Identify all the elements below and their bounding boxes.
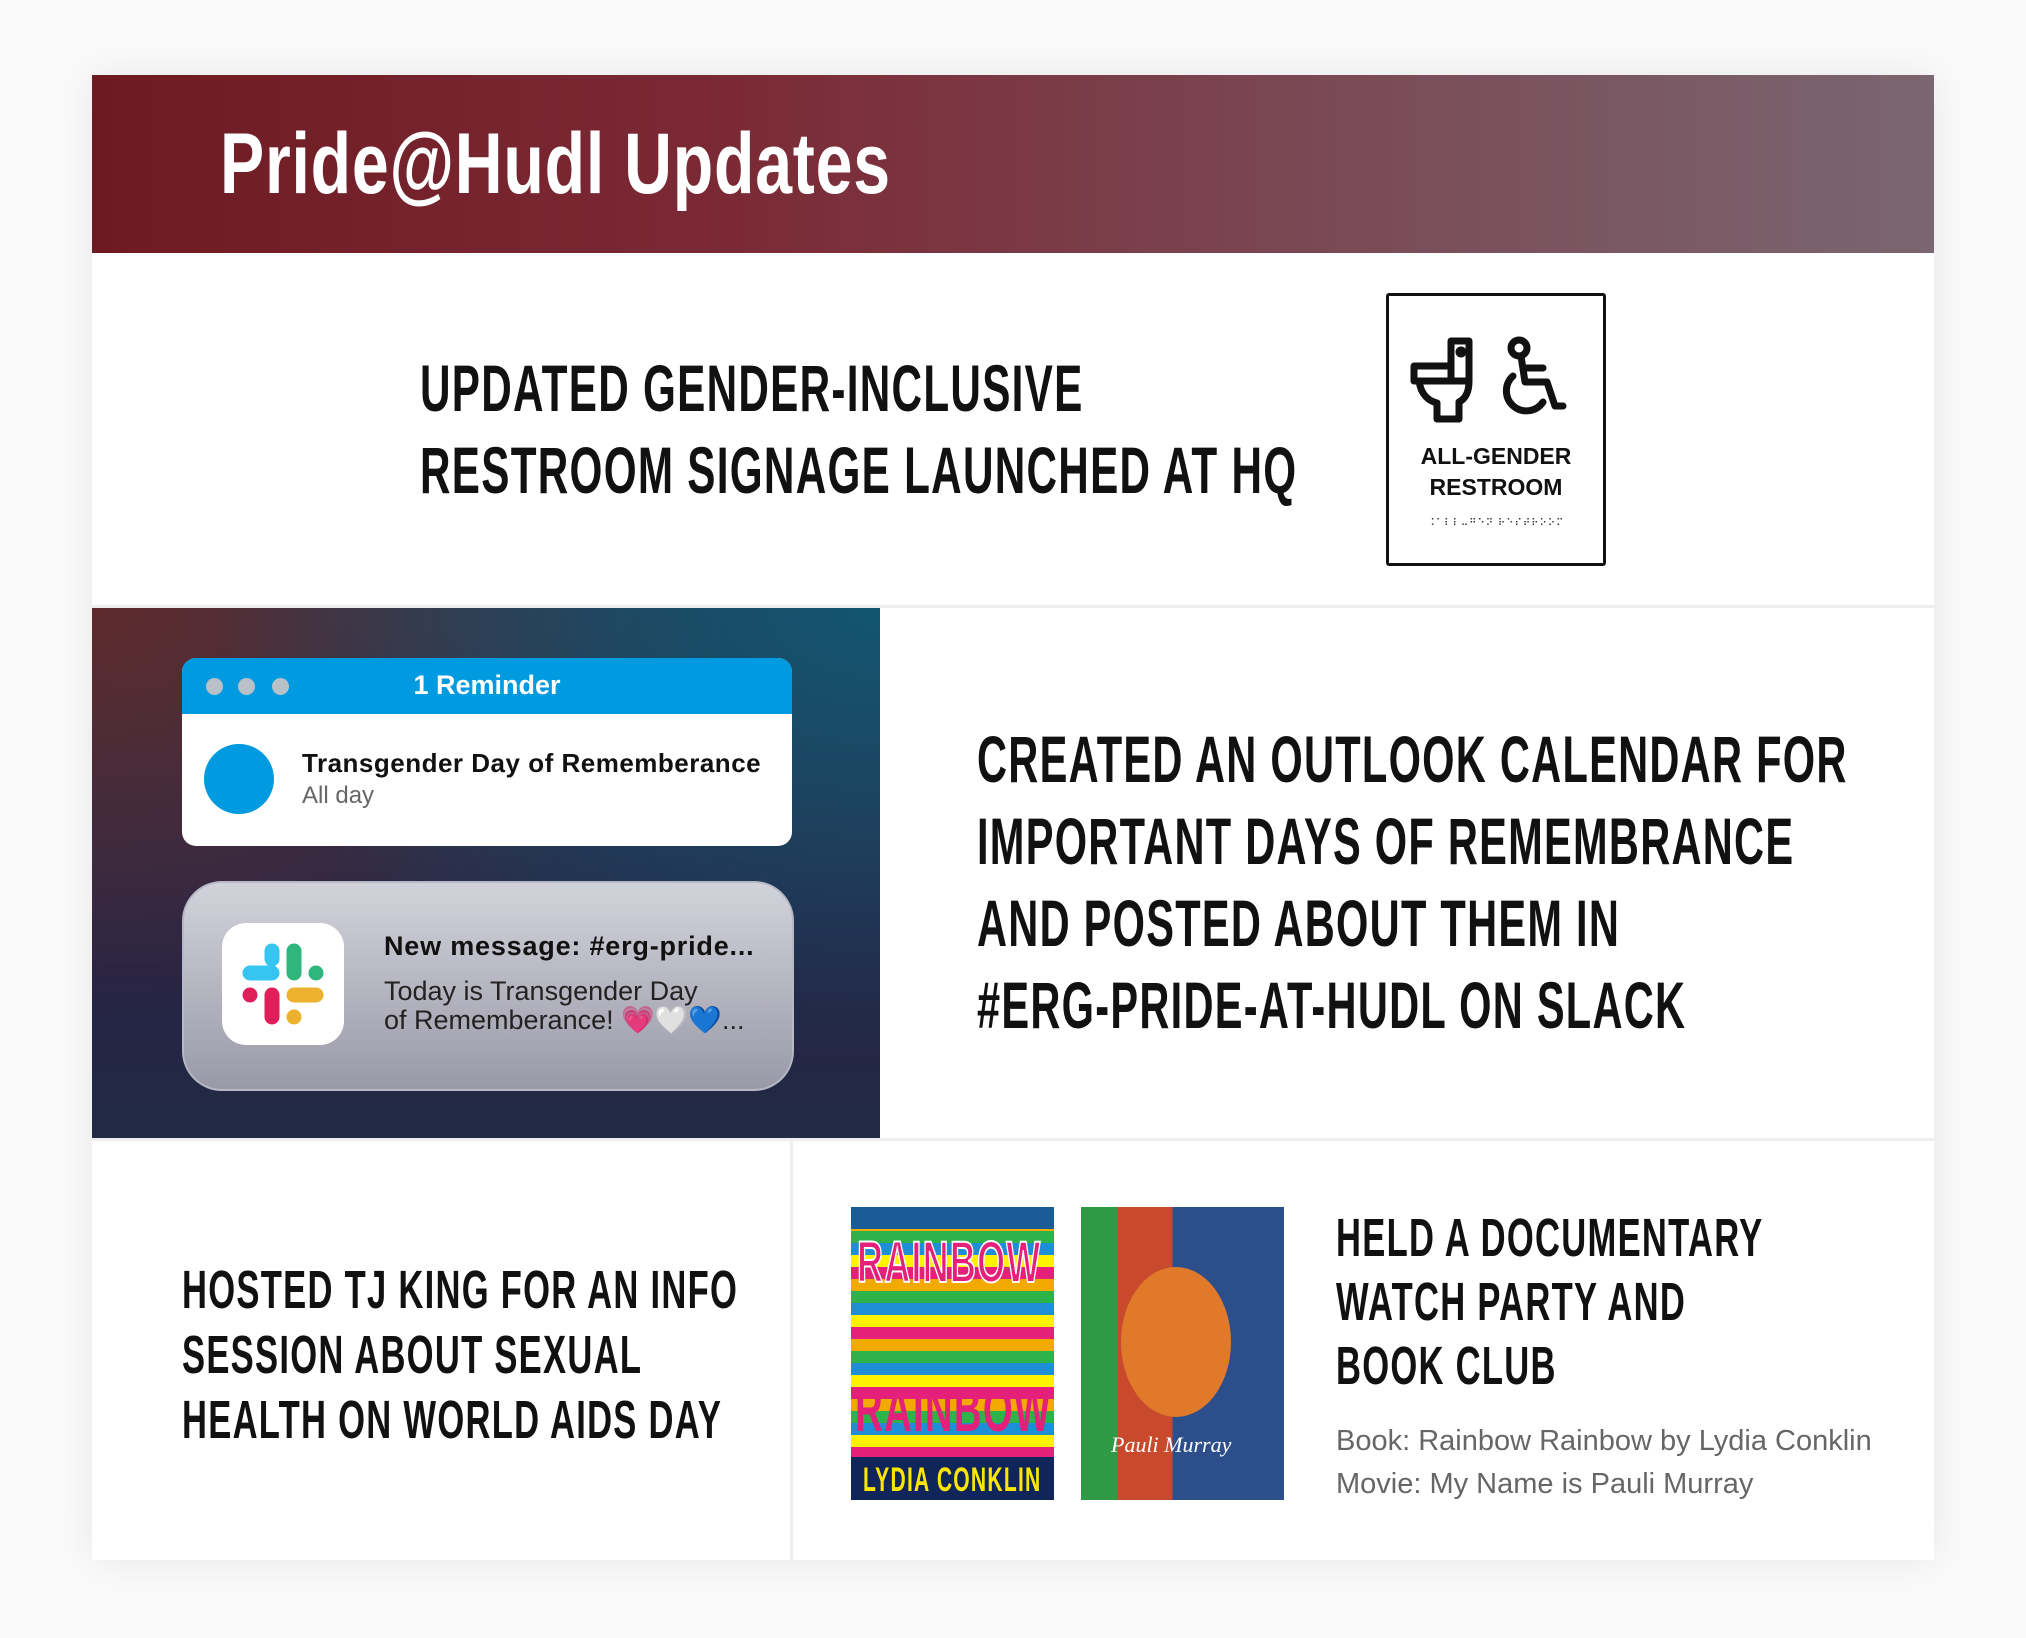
text: outlook calendar: #ERG-PRIDE-AT-HUDL ON SLACK <box>977 968 1686 1042</box>
text: TJ King session: HEALTH ON WORLD AIDS DAY <box>182 1390 722 1450</box>
slack notification: New message: #erg-pride... <box>384 931 754 961</box>
text: restroom signage: UPDATED GENDER-INCLUSIVE <box>420 351 1084 425</box>
reminder card: All day <box>302 782 374 809</box>
text: outlook calendar: IMPORTANT DAYS OF REMEMBRANCE <box>977 804 1794 878</box>
book cover: Rainbow Rainbow: RAINBOW <box>855 1376 1052 1445</box>
text: TJ King session: HOSTED TJ KING FOR AN INFO <box>182 1260 738 1320</box>
text: documentary + book club: WATCH PARTY AND <box>1336 1272 1686 1332</box>
reminder card: 1 Reminder <box>413 670 561 700</box>
movie poster: My Name is Pauli Murray <box>1081 1207 1284 1500</box>
icon: restroom sign: ALL-GENDER <box>1421 443 1571 469</box>
book cover: Rainbow Rainbow: LYDIA CONKLIN <box>863 1461 1042 1499</box>
slack notification <box>182 881 794 1091</box>
icon: restroom sign <box>1386 293 1606 566</box>
slack notification: Today is Transgender Day <box>384 976 698 1006</box>
text: TJ King session: SESSION ABOUT SEXUAL <box>182 1325 642 1385</box>
text: documentary + book club <box>1336 1208 1764 1396</box>
text: documentary + book club: BOOK CLUB <box>1336 1336 1557 1396</box>
movie poster: My Name is Pauli Murray: Pauli Murray <box>1111 1432 1231 1457</box>
text: restroom signage <box>420 351 1297 507</box>
text: documentary + book club: HELD A DOCUMENTARY <box>1336 1208 1764 1268</box>
text: outlook calendar: AND POSTED ABOUT THEM IN <box>977 886 1620 960</box>
icon: restroom sign: RESTROOM <box>1430 474 1562 500</box>
book cover: Rainbow Rainbow <box>851 1207 1054 1500</box>
text: TJ King session <box>182 1260 738 1450</box>
header banner <box>92 75 1934 253</box>
icon: restroom sign: ⠨⠁⠇⠇⠤⠛⠑⠝ ⠗⠑⠎⠞⠗⠕⠕⠍ <box>1428 518 1564 529</box>
panel: notifications image <box>92 608 880 1138</box>
text: book and movie details: Movie: My Name is Pauli Murray <box>1336 1468 1753 1500</box>
reminder card <box>182 658 792 846</box>
reminder card: Transgender Day of Rememberance <box>302 748 761 778</box>
text: outlook calendar: CREATED AN OUTLOOK CALENDAR FOR <box>977 722 1848 796</box>
text: outlook calendar <box>977 722 1848 1042</box>
title: Pride@Hudl Updates <box>220 116 891 212</box>
text: book and movie details <box>1336 1425 1872 1500</box>
book cover: Rainbow Rainbow: RAINBOW <box>857 1230 1041 1295</box>
text: book and movie details: Book: Rainbow Rainbow by Lydia Conklin <box>1336 1425 1872 1457</box>
row divider lines <box>92 605 1934 608</box>
text: restroom signage: RESTROOM SIGNAGE LAUNCHED AT HQ <box>420 433 1297 507</box>
slack notification: of Rememberance! 💗🤍💙... <box>384 1005 744 1035</box>
